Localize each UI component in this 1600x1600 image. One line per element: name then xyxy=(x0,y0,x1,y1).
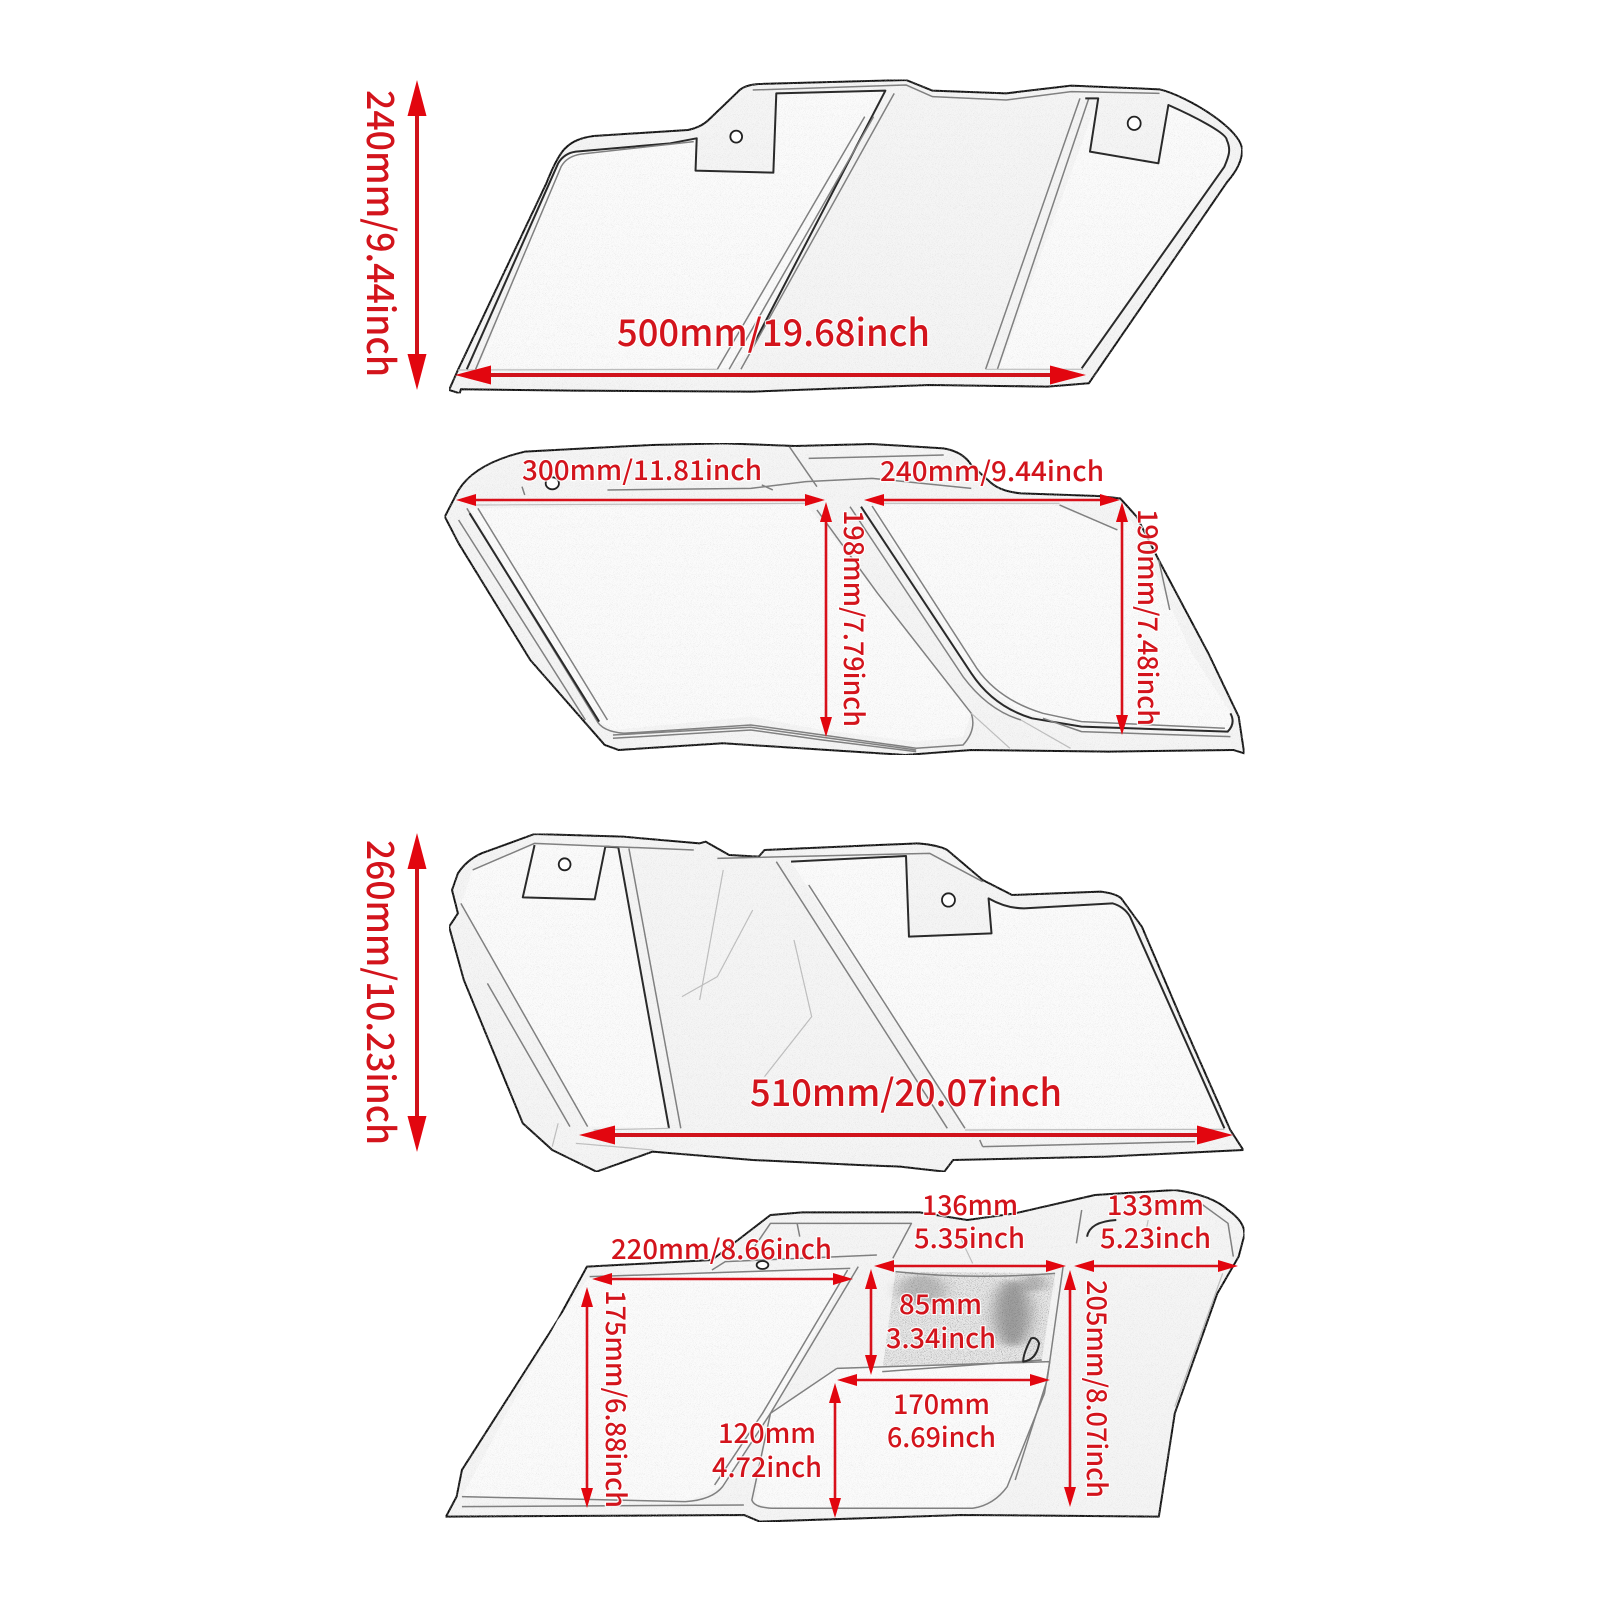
dimension text: 136mm 5.35inch xyxy=(914,1184,1025,1256)
dimension text: 85mm 3.34inch: 85mm xyxy=(899,1283,982,1322)
bag liner outline 2 xyxy=(445,443,1244,755)
dimension text: 170mm 6.69inch: 170mm xyxy=(893,1383,990,1422)
dimension text: 300mm/11.81inch: 300mm/11.81inch xyxy=(522,449,762,488)
panel: outer lid view, 500mm by 240mm xyxy=(356,80,1242,393)
dimension text: 240mm/9.44inch: 240mm/9.44inch xyxy=(356,90,411,377)
panel: outer lid view, 510mm by 260mm xyxy=(356,834,1243,1172)
arrow: 300mm width xyxy=(462,499,819,501)
bag liner outline 4 xyxy=(446,1190,1244,1522)
icon: mounting hole right xyxy=(1128,117,1141,130)
panel: inner compartments, 300mm and 240mm xyxy=(445,443,1244,755)
dimension text: 175mm/6.88inch: 175mm/6.88inch xyxy=(598,1290,637,1508)
dimension text: 260mm/10.23inch: 260mm/10.23inch xyxy=(356,840,411,1145)
arrow: 240mm width xyxy=(870,499,1114,501)
arrow: 85mm height xyxy=(870,1275,872,1369)
dimension text: 133mm 5.23inch xyxy=(1100,1184,1211,1256)
icon: mounting hole right xyxy=(942,893,955,907)
arrow: 133mm width xyxy=(1080,1265,1232,1267)
dimension text: 190mm/7.48inch: 190mm/7.48inch xyxy=(1130,509,1169,726)
dimension text: 120mm 4.72inch: 4.72inch xyxy=(712,1446,822,1485)
bag liner outline 1 xyxy=(449,80,1242,393)
mesh pocket xyxy=(882,1272,1055,1372)
dimension text: 120mm 4.72inch xyxy=(712,1412,822,1485)
dimension text: 133mm 5.23inch: 5.23inch xyxy=(1100,1217,1211,1256)
dimension text: 240mm/9.44inch: 240mm/9.44inch xyxy=(880,450,1104,489)
icon: mounting hole xyxy=(559,858,571,870)
dimension text: 198mm/7.79inch: 198mm/7.79inch xyxy=(836,510,875,727)
dimension text: 85mm 3.34inch: 3.34inch xyxy=(886,1317,996,1356)
panel: inner compartments with mesh pocket xyxy=(446,1184,1244,1522)
arrow: 205mm height xyxy=(1069,1276,1071,1501)
icon: mounting hole xyxy=(730,131,742,143)
arrow: 120mm height xyxy=(834,1389,836,1512)
dimension text: 500mm/19.68inch: 500mm/19.68inch xyxy=(617,303,930,357)
dimension text: 136mm 5.35inch: 5.35inch xyxy=(914,1217,1025,1256)
dimension text: 133mm 5.23inch: 133mm xyxy=(1107,1184,1204,1223)
dimension text: 205mm/8.07inch: 205mm/8.07inch xyxy=(1079,1280,1118,1498)
dimension text: 85mm 3.34inch xyxy=(886,1283,996,1356)
arrow: 220mm width xyxy=(598,1278,847,1280)
arrow: width xyxy=(589,1133,1223,1137)
dimension text: 120mm 4.72inch: 120mm xyxy=(718,1412,816,1451)
arrow: 198mm height xyxy=(825,508,827,731)
arrow: width xyxy=(465,373,1076,377)
arrow: 136mm width xyxy=(880,1265,1060,1267)
arrow: height xyxy=(415,843,419,1142)
dimension text: 510mm/20.07inch: 510mm/20.07inch xyxy=(750,1063,1062,1117)
arrow: height xyxy=(415,90,419,380)
icon: hole xyxy=(546,477,559,489)
arrow: 170mm width xyxy=(843,1379,1044,1381)
dimension text: 170mm 6.69inch: 6.69inch xyxy=(887,1416,996,1455)
arrow: 190mm height xyxy=(1121,508,1123,729)
icon: hole xyxy=(757,1261,768,1269)
dimension text: 220mm/8.66inch: 220mm/8.66inch xyxy=(611,1228,832,1267)
arrow: 175mm height xyxy=(586,1293,588,1502)
dimension text: 170mm 6.69inch xyxy=(887,1383,996,1455)
dimension text: 136mm 5.35inch: 136mm xyxy=(922,1184,1018,1223)
bag liner outline 3 xyxy=(449,834,1243,1172)
